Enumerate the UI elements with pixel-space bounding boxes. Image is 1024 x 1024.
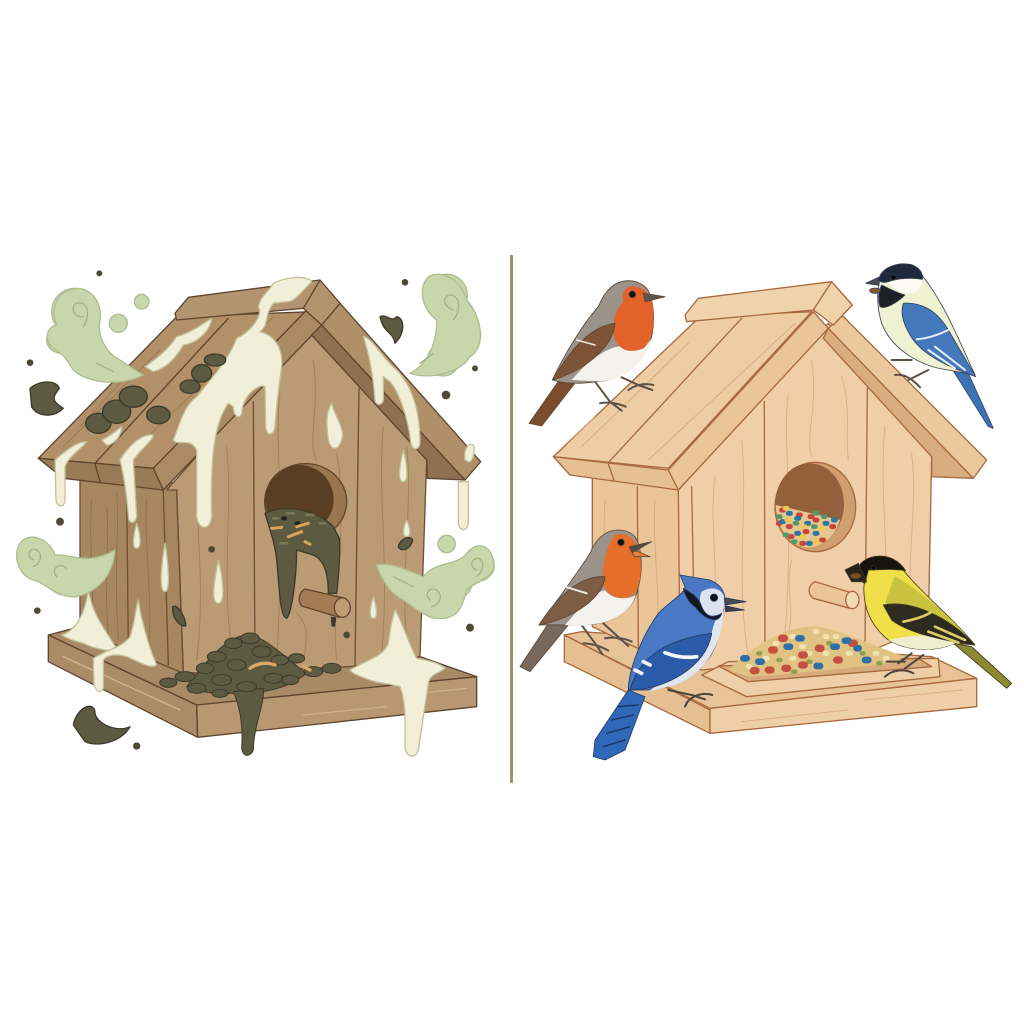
- stink clouds: [17, 274, 494, 618]
- seed tray: [702, 658, 940, 697]
- dirty platform base: [48, 625, 477, 737]
- clean entrance hole with seeds: [775, 462, 856, 552]
- droppings heap on platform: [160, 633, 341, 755]
- chickadee on roof: [866, 264, 993, 428]
- perch: [809, 582, 859, 609]
- perch: [299, 589, 350, 627]
- clean roof: [553, 282, 987, 490]
- white droppings: [55, 277, 474, 756]
- dirty front wall: [167, 323, 427, 673]
- seed pile: [728, 626, 905, 677]
- clean left wall: [592, 473, 682, 653]
- blue jay: [593, 575, 746, 760]
- goldfinch: [845, 556, 1012, 688]
- clean platform base: [564, 632, 977, 733]
- dirty left wall: [80, 473, 183, 673]
- dirty entrance hole: [265, 464, 347, 540]
- flies and specks: [27, 270, 478, 750]
- robin on roof: [529, 281, 665, 426]
- divider line: [510, 255, 513, 783]
- panel: clean bird feeder: [520, 264, 1012, 760]
- panel: dirty bird feeder: [17, 270, 494, 756]
- dark droppings on roof and floating: [30, 316, 413, 744]
- robin on platform: [520, 530, 652, 672]
- dirty roof: [38, 280, 481, 490]
- clean front wall: [678, 323, 932, 670]
- droppings spilling from hole: [265, 509, 340, 618]
